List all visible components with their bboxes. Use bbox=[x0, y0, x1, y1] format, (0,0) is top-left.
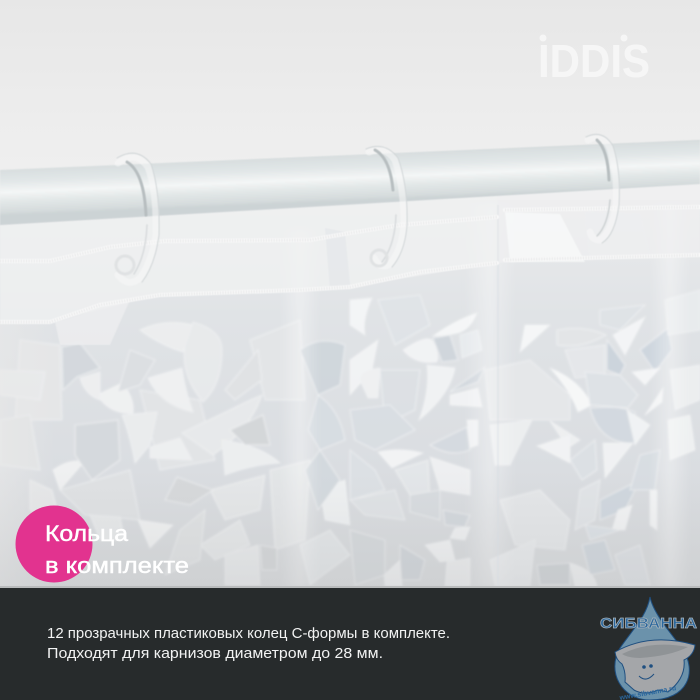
shower curtain rod bbox=[0, 140, 700, 225]
fold highlights bbox=[0, 205, 700, 588]
curtain hem area bbox=[0, 180, 700, 588]
bottom caption panel bbox=[0, 586, 700, 700]
icon: water drop bbox=[615, 597, 689, 700]
caption text: 12 прозрачных пластиковых колец С-формы в комплекте. bbox=[47, 625, 450, 642]
logo wordmark: СИБВАННА bbox=[600, 615, 697, 632]
curtain mosaic pattern bbox=[0, 290, 700, 587]
watermark: Сибванна logo bbox=[600, 597, 697, 700]
caption text: Подходят для карнизов диаметром до 28 мм. bbox=[47, 645, 383, 662]
IDDIS logo: IDDIS bbox=[538, 35, 650, 87]
icon: smiling bathtub bbox=[615, 640, 695, 693]
badge heading bbox=[45, 521, 189, 578]
pink circle badge bbox=[16, 506, 92, 582]
wall background bbox=[0, 0, 700, 240]
ring 1 bbox=[116, 153, 159, 282]
ring 3 bbox=[586, 134, 619, 243]
badge heading: Кольца bbox=[45, 521, 129, 546]
caption text bbox=[47, 625, 450, 662]
curtain rope hem bands bbox=[0, 207, 700, 322]
ring 2 bbox=[366, 146, 407, 267]
badge heading: в комплекте bbox=[45, 553, 189, 578]
curtain base bbox=[0, 200, 700, 588]
